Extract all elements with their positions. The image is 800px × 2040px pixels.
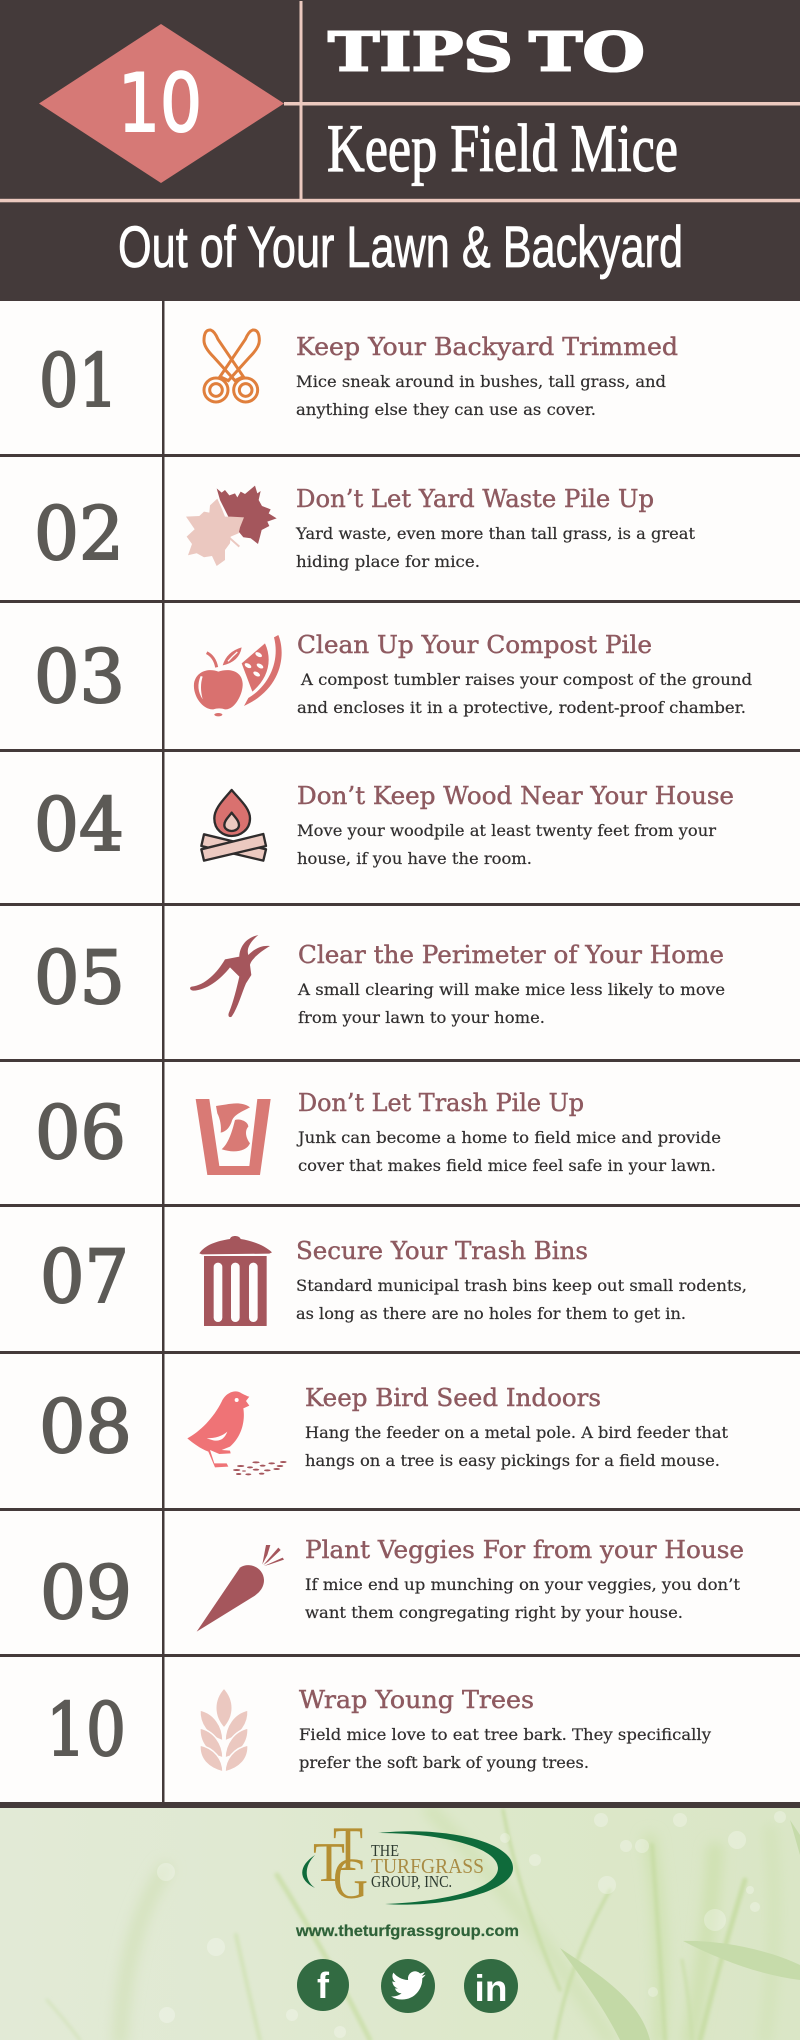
description [296, 1129, 721, 1175]
grass background photo [0, 1808, 800, 2040]
tip 03 [34, 631, 752, 720]
heading: Plant Veggies For from your House [305, 1536, 744, 1564]
description: Standard municipal trash bins keep out small rodents, [296, 1277, 747, 1295]
heading: Secure Your Trash Bins [296, 1237, 588, 1265]
title line: keep field mice: Keep Field Mice [327, 110, 678, 186]
title line: tips to: TO [529, 20, 645, 84]
description: hiding place for mice. [296, 553, 480, 571]
description: A small clearing will make mice less likely to move [297, 981, 725, 999]
number 10: 10 [46, 1688, 126, 1773]
logo: the turfgrass group: TURFGRASS [371, 1854, 484, 1878]
description: Junk can become a home to field mice and provide [296, 1129, 721, 1147]
title line: tips to: TIPS [328, 20, 513, 84]
description [297, 822, 717, 868]
number 05: 05 [34, 936, 125, 1021]
icon: campfire [201, 790, 266, 861]
diamond badge [39, 24, 284, 183]
icon: maple leaves [186, 486, 277, 566]
logo: the turfgrass group: THE [371, 1841, 399, 1860]
description [297, 671, 752, 717]
description: Hang the feeder on a metal pole. A bird feeder that [305, 1424, 729, 1442]
icon: linkedin: in [475, 1968, 507, 2009]
icon: wheat [200, 1688, 248, 1772]
icon: scissors [204, 330, 259, 402]
description: prefer the soft bark of young trees. [299, 1754, 589, 1772]
number 03: 03 [34, 635, 125, 720]
heading: Keep Bird Seed Indoors [305, 1384, 601, 1412]
heading: Don’t Let Yard Waste Pile Up [296, 485, 654, 513]
description: anything else they can use as cover. [296, 401, 596, 419]
number 01: 01 [39, 339, 118, 424]
description: want them congregating right by your house. [305, 1604, 683, 1622]
logo: the turfgrass group: GROUP, INC. [371, 1872, 452, 1891]
description: Move your woodpile at least twenty feet from your [297, 822, 717, 840]
header banner [0, 0, 800, 301]
tip 07 [40, 1235, 747, 1326]
tip 10 [46, 1686, 711, 1773]
tip 06 [35, 1089, 721, 1176]
tip 08 [39, 1384, 729, 1475]
icon: facebook [297, 1959, 349, 2011]
icon: twitter [381, 1959, 435, 2013]
description: Field mice love to eat tree bark. They specifically [299, 1726, 711, 1744]
number 07: 07 [40, 1235, 129, 1320]
tip 09 [40, 1536, 744, 1636]
icon: overflowing trash cup [196, 1099, 271, 1175]
description [305, 1576, 741, 1622]
heading: Keep Your Backyard Trimmed [296, 333, 678, 361]
icon: trash bin [199, 1236, 272, 1326]
tip 05 [34, 935, 725, 1027]
logo: the turfgrass group: T [333, 1813, 363, 1884]
heading: Clean Up Your Compost Pile [297, 631, 652, 659]
icon: apple and melon [194, 635, 282, 716]
description: as long as there are no holes for them to get in. [296, 1305, 686, 1323]
tip 01 [39, 330, 678, 424]
heading: Don’t Let Trash Pile Up [298, 1089, 584, 1117]
icon: facebook: f [317, 1965, 330, 2006]
description: from your lawn to your home. [298, 1009, 545, 1027]
description [295, 525, 696, 571]
title line: tips to [328, 20, 645, 84]
icon: linkedin [464, 1959, 518, 2013]
tip 02 [34, 485, 696, 577]
description: cover that makes field mice feel safe in your lawn. [298, 1157, 716, 1175]
icon: carrot [197, 1545, 284, 1632]
description [299, 1726, 711, 1772]
description: hangs on a tree is easy pickings for a field mouse. [305, 1452, 720, 1470]
table grid lines [0, 301, 800, 1808]
description: house, if you have the room. [297, 850, 532, 868]
description [305, 1424, 729, 1470]
number 02: 02 [34, 492, 124, 577]
tip 04 [34, 782, 734, 868]
description: Yard waste, even more than tall grass, is a great [295, 525, 696, 543]
description: and encloses it in a protective, rodent-proof chamber. [297, 699, 746, 717]
number 09: 09 [40, 1551, 132, 1636]
number 04: 04 [34, 783, 124, 868]
description [297, 981, 725, 1027]
description: If mice end up munching on your veggies, you don’t [305, 1576, 741, 1594]
heading: Don’t Keep Wood Near Your House [297, 782, 734, 810]
icon: pruning shears [190, 935, 270, 1017]
heading: Wrap Young Trees [299, 1686, 534, 1714]
logo: the turfgrass group: T [313, 1832, 345, 1894]
description: Mice sneak around in bushes, tall grass, and [296, 373, 666, 391]
footer panel [0, 1808, 800, 2040]
description: A compost tumbler raises your compost of the ground [300, 671, 752, 689]
logo: the turfgrass group: G [333, 1846, 368, 1911]
description [296, 373, 666, 419]
website url: www.theturfgrassgroup.com [295, 1923, 519, 1940]
number 06: 06 [35, 1091, 126, 1176]
logo: the turfgrass group [302, 1813, 513, 1911]
number 08: 08 [39, 1385, 132, 1470]
icon: bird and seeds [187, 1391, 287, 1475]
description [296, 1277, 747, 1323]
diamond badge: 10 [118, 57, 202, 150]
heading: Clear the Perimeter of Your Home [298, 941, 724, 969]
